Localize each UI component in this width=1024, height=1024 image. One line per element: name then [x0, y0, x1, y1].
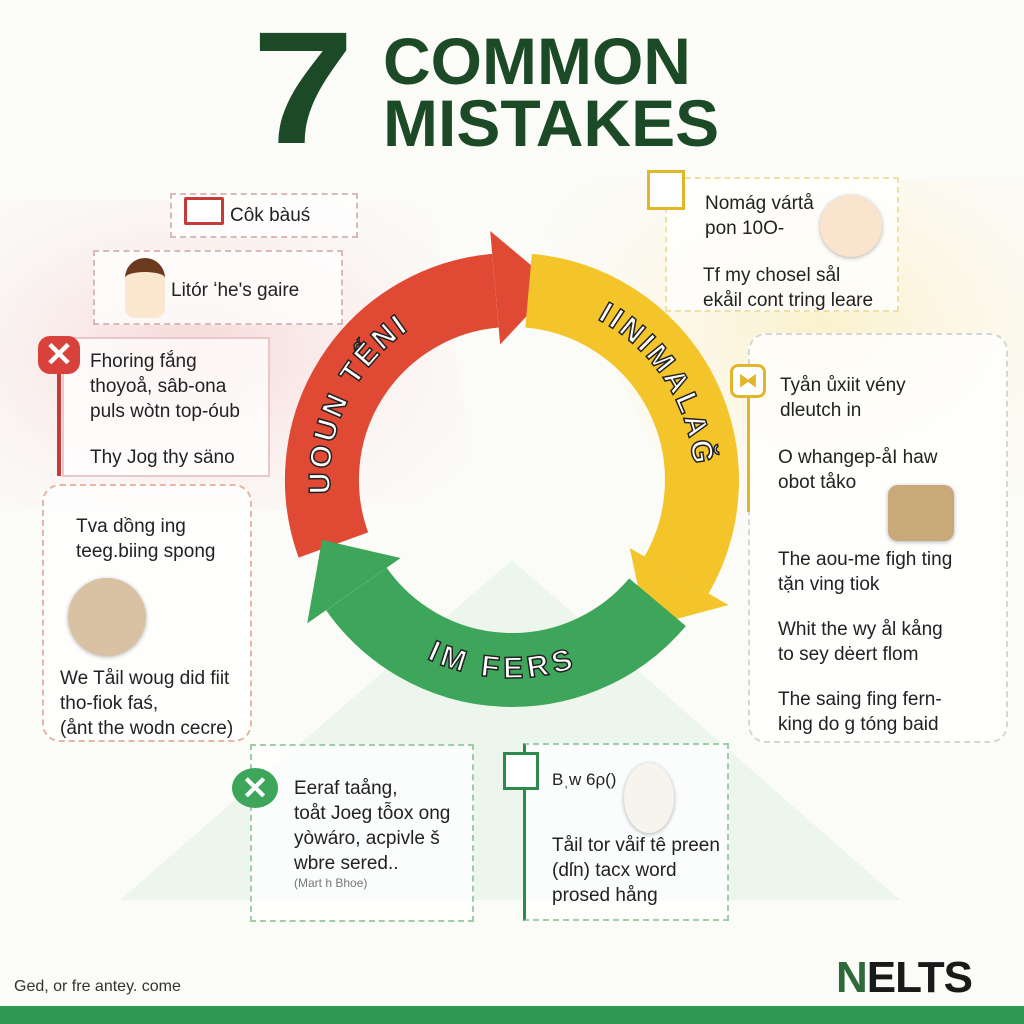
icon: map [888, 485, 954, 541]
panel: bottom-left green: yòwáro, acpivle š [294, 828, 440, 849]
icon: girl [125, 258, 165, 318]
footer bar [0, 1006, 1024, 1024]
icon: green cross [232, 768, 278, 808]
arrow: red: UOUN TẾNI [308, 314, 408, 494]
panel: right: Whit the wy ål kång [778, 619, 943, 640]
title: 7 [252, 0, 354, 177]
icon: boy [624, 763, 674, 833]
footer text: Ged, or fre antey. come [14, 978, 181, 995]
panel: bottom-middle green [523, 743, 729, 921]
icon: yellow badge: ⧓ [738, 370, 758, 392]
icon: hand [820, 195, 882, 257]
panel: red cross: Fhoring fắng [90, 351, 197, 372]
panel: left lower: We Tåil woug did fiit [60, 668, 229, 689]
panel: left lower: Tva dồng ing [76, 516, 186, 537]
panel: bottom-left green: Eeraf taång, [294, 778, 398, 799]
logo: NELTS [836, 953, 972, 1002]
arrow: yellow [525, 254, 739, 619]
title: COMMON [383, 24, 691, 98]
icon: red card [184, 197, 224, 225]
panel: bottom-middle green: prosed hång [552, 885, 658, 906]
panel: right: O whangep-åI haw [778, 447, 938, 468]
panel: top-right [665, 177, 899, 312]
panel: right: The aou-me figh ting [778, 549, 952, 570]
panel: right: Tyån ůxiit vény [780, 375, 906, 396]
arrow: green: IM FERS [428, 640, 572, 679]
arrow: red [284, 231, 531, 558]
icon: yellow square [647, 170, 685, 210]
panel: right: to sey dėert flom [778, 644, 918, 665]
panel: right: The saing fing fern- [778, 689, 942, 710]
panel: girl: Litór ʻhe's gaire [171, 280, 299, 301]
panel: right: obot tåko [778, 472, 856, 493]
panel: right: king do g tóng baid [778, 714, 939, 735]
panel: bottom-middle green: (dſn) tacx word [552, 860, 677, 881]
panel: girl [93, 250, 343, 325]
panel: top-left small [170, 193, 358, 238]
panel: right: dleutch in [780, 400, 861, 421]
arrow: yellow: IINIMALAĞ [598, 301, 720, 463]
panel: left lower: teeg.biing spong [76, 541, 215, 562]
panel: red cross: Thy Jog thy säno [90, 447, 235, 468]
panel: top-right: pon 10O- [705, 218, 784, 239]
icon: red cross badge [38, 336, 80, 476]
panel: bottom-middle green: Bˌw 6ρ() [552, 770, 616, 789]
panel: bottom-left green: (Mart h Bhoe) [294, 876, 367, 890]
panel: red cross [62, 337, 270, 477]
panel: top-right: ekåil cont tring leare [703, 290, 873, 311]
title [252, 0, 719, 177]
panel: left lower [42, 484, 252, 742]
panel: left lower: (ånt the wodn cecre) [60, 718, 233, 739]
icon: green cross: ✕ [242, 770, 268, 806]
icon: red cross badge: ✕ [45, 336, 73, 374]
panel: bottom-left green: wbre sered.. [294, 853, 399, 874]
icon: green square [503, 752, 539, 790]
title: MISTAKES [383, 86, 719, 160]
panel: top-left small: Côk bàuś [230, 205, 310, 226]
panel: bottom-middle green: Tåil tor våif tê preen [552, 835, 720, 856]
panel: left lower: tho-fiok faś, [60, 693, 158, 714]
panel: red cross: thoyoå, sâb-ona [90, 376, 226, 397]
panel: top-right: Tf my chosel sål [703, 265, 840, 286]
panel: red cross: puls wòtn top-óub [90, 401, 240, 422]
panel: top-right: Nomág vártå [705, 193, 814, 214]
icon: man photo [68, 578, 146, 656]
panel: right: tặn ving tiok [778, 574, 879, 595]
panel: bottom-left green [250, 744, 474, 922]
panel: right [748, 333, 1008, 743]
arrow: green [307, 540, 686, 707]
icon: yellow badge [730, 364, 766, 512]
panel: bottom-left green: toåt Joeg tỗox ong [294, 803, 450, 824]
